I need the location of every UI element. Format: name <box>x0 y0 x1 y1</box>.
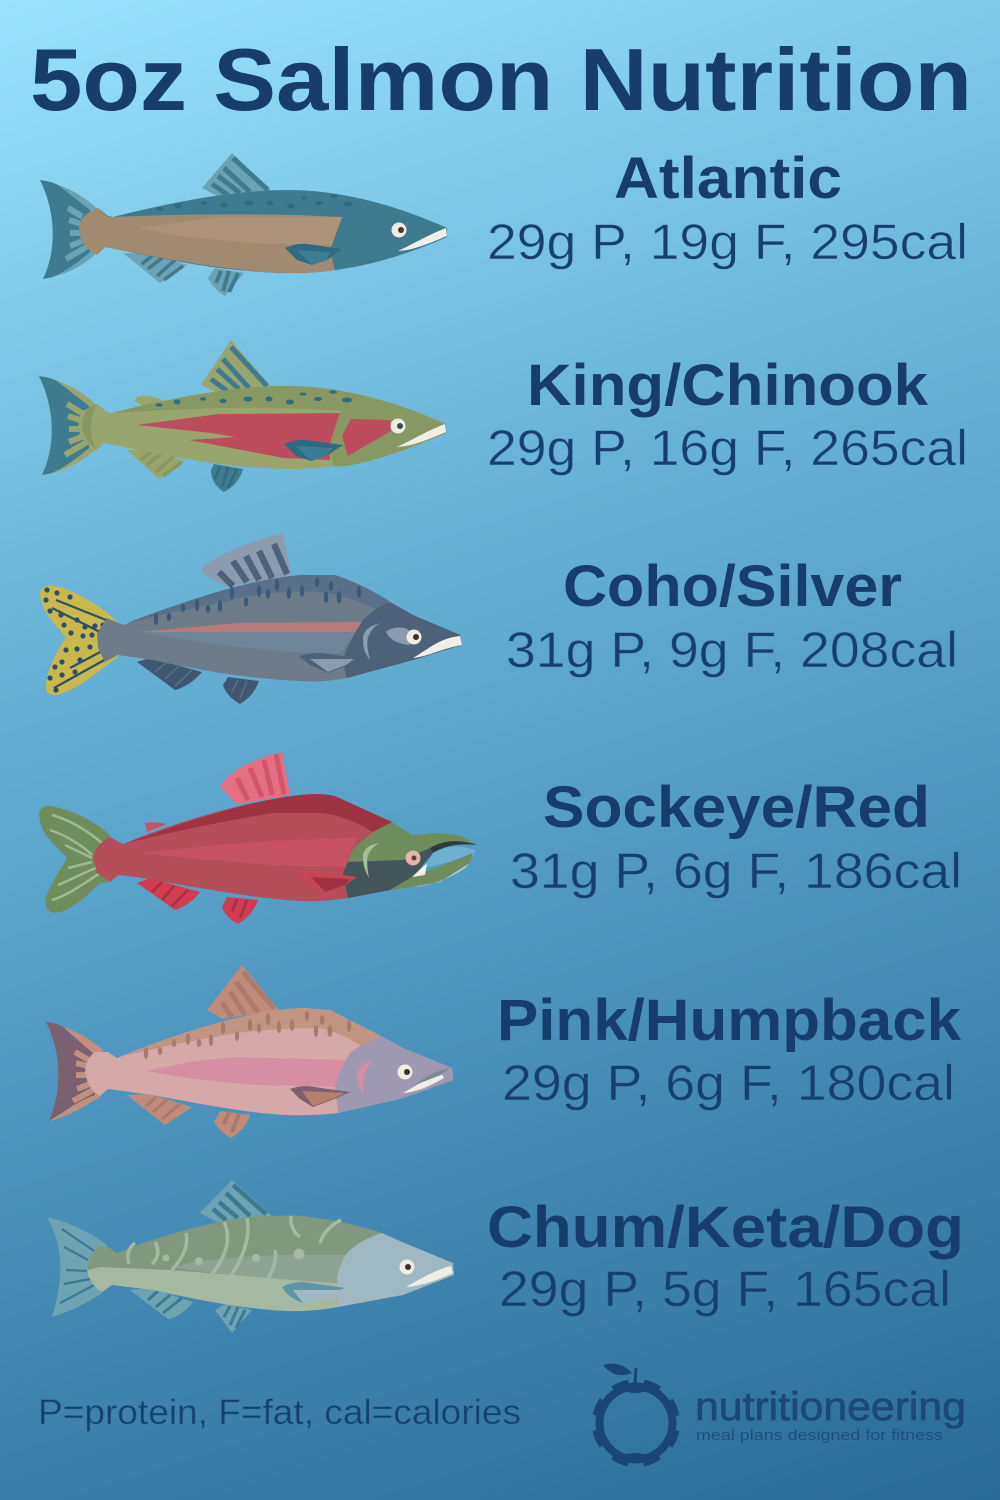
eye <box>406 630 422 644</box>
fish: Coho/Silver salmon <box>40 533 462 704</box>
text: King/Chinook: 29g P, 16g F, 265cal <box>487 420 968 476</box>
text: Coho/Silver <box>506 554 958 678</box>
pectoral fin <box>285 244 342 265</box>
belly blue band <box>140 632 357 653</box>
ventral fin <box>223 677 259 704</box>
text: Pink/Humpback: Pink/Humpback <box>497 988 962 1053</box>
tail fin <box>46 1022 103 1121</box>
flesh side <box>79 208 342 273</box>
ventral fin <box>214 1111 250 1138</box>
body <box>93 794 400 901</box>
body <box>85 1008 453 1115</box>
footnote legend: P=protein, F=fat, cal=calories <box>38 1393 521 1432</box>
ventral fin <box>222 897 258 924</box>
logo: nutritioneering <box>588 1364 966 1471</box>
text: King/Chinook <box>487 353 968 476</box>
text: Atlantic: 29g P, 19g F, 295cal <box>487 214 968 270</box>
pectoral fin <box>290 1086 350 1107</box>
adipose fin <box>135 396 165 407</box>
anal fin <box>137 658 202 690</box>
fish: King/Chinook salmon <box>39 340 446 492</box>
lower body <box>87 1267 338 1311</box>
mouth <box>398 228 447 251</box>
text: Chum/Keta/Dog: Chum/Keta/Dog <box>487 1195 964 1260</box>
anal fin <box>127 450 185 479</box>
lower head <box>343 848 433 898</box>
logo wordmark: nutritioneering <box>695 1385 966 1429</box>
logo icon: apple gear <box>588 1364 684 1471</box>
tail fin <box>39 806 110 913</box>
spots <box>154 577 361 625</box>
mouth <box>413 636 462 658</box>
dorsal fin <box>202 533 291 587</box>
back band <box>112 386 446 466</box>
dorsal fin <box>200 1180 272 1222</box>
pectoral fin <box>299 653 359 673</box>
fish: Chum/Keta/Dog salmon <box>47 1180 454 1333</box>
dorsal fin <box>201 340 272 392</box>
text: Coho/Silver: Coho/Silver <box>563 554 902 619</box>
title: 5oz Salmon Nutrition <box>30 30 972 129</box>
dark red back <box>127 794 392 843</box>
dorsal fin <box>220 752 290 804</box>
head <box>337 1233 454 1307</box>
tail ring <box>82 404 97 449</box>
text: Pink/Humpback <box>497 988 962 1111</box>
red side stripe <box>137 413 340 460</box>
eye <box>400 1260 414 1274</box>
eye <box>406 850 420 866</box>
body <box>87 1216 382 1311</box>
fish: Pink/Humpback salmon <box>46 965 453 1138</box>
lighter flesh stripe <box>138 217 342 245</box>
spots <box>156 390 352 407</box>
text: Atlantic: Atlantic <box>614 146 842 211</box>
jaw edge <box>413 863 470 887</box>
fish: Sockeye/Red salmon <box>39 752 477 924</box>
ventral fin <box>208 268 244 296</box>
gill mark <box>357 1061 373 1096</box>
adipose fin <box>145 822 167 832</box>
light red stripe <box>140 838 357 867</box>
anal fin <box>127 1094 192 1125</box>
spots <box>144 1011 351 1059</box>
gill mark <box>363 623 380 660</box>
mouth interior <box>425 847 475 868</box>
red cheek <box>342 419 391 456</box>
body <box>80 190 447 273</box>
logo tagline: meal plans designed for fitness <box>696 1427 943 1444</box>
red lateral stripe <box>140 622 362 632</box>
body <box>97 575 462 682</box>
text: Chum/Keta/Dog <box>487 1195 964 1317</box>
anal fin <box>130 1288 193 1319</box>
pink stripe <box>147 1057 350 1087</box>
mouth <box>406 1266 453 1287</box>
text: Sockeye/Red: 31g P, 6g F, 186cal <box>510 843 962 899</box>
body <box>78 386 446 469</box>
spots <box>156 194 353 211</box>
dorsal fin <box>207 965 279 1019</box>
head <box>344 603 462 678</box>
mouth <box>403 1068 450 1093</box>
pectoral fin <box>282 1282 345 1303</box>
eye patch <box>386 628 412 645</box>
tooth <box>412 863 427 877</box>
tail fin <box>40 586 120 695</box>
text: King/Chinook: King/Chinook <box>527 353 929 418</box>
stripe markings <box>128 1216 341 1281</box>
head <box>335 1037 453 1113</box>
back band <box>127 575 392 623</box>
text: Atlantic <box>487 146 968 270</box>
upper beak line <box>430 841 477 853</box>
anal fin <box>137 878 200 910</box>
text: Pink/Humpback: 29g P, 6g F, 180cal <box>502 1055 955 1111</box>
text: Chum/Keta/Dog: 29g P, 5g F, 165cal <box>499 1261 951 1317</box>
tail fin <box>47 1217 107 1317</box>
eye <box>398 1064 412 1080</box>
dorsal fin <box>202 153 272 196</box>
text: Coho/Silver: 31g P, 9g F, 208cal <box>506 622 958 678</box>
anal fin <box>123 253 187 283</box>
back band <box>120 1008 383 1057</box>
pectoral fin <box>284 440 343 461</box>
mid band <box>175 1255 348 1283</box>
head top green <box>348 822 477 862</box>
text: Sockeye/Red: Sockeye/Red <box>543 775 930 840</box>
ventral fin <box>211 464 243 492</box>
text: Sockeye/Red <box>510 775 962 899</box>
ventral fin <box>215 1304 252 1333</box>
eye <box>390 418 406 434</box>
mouth <box>397 424 446 447</box>
tail fin <box>39 376 99 475</box>
round markings <box>162 1248 304 1265</box>
fish: Atlantic salmon <box>40 153 447 296</box>
lower jaw <box>390 853 473 890</box>
gill mark <box>363 843 379 878</box>
tail fin <box>40 180 100 279</box>
eye <box>392 222 406 238</box>
pectoral fin <box>298 872 357 893</box>
